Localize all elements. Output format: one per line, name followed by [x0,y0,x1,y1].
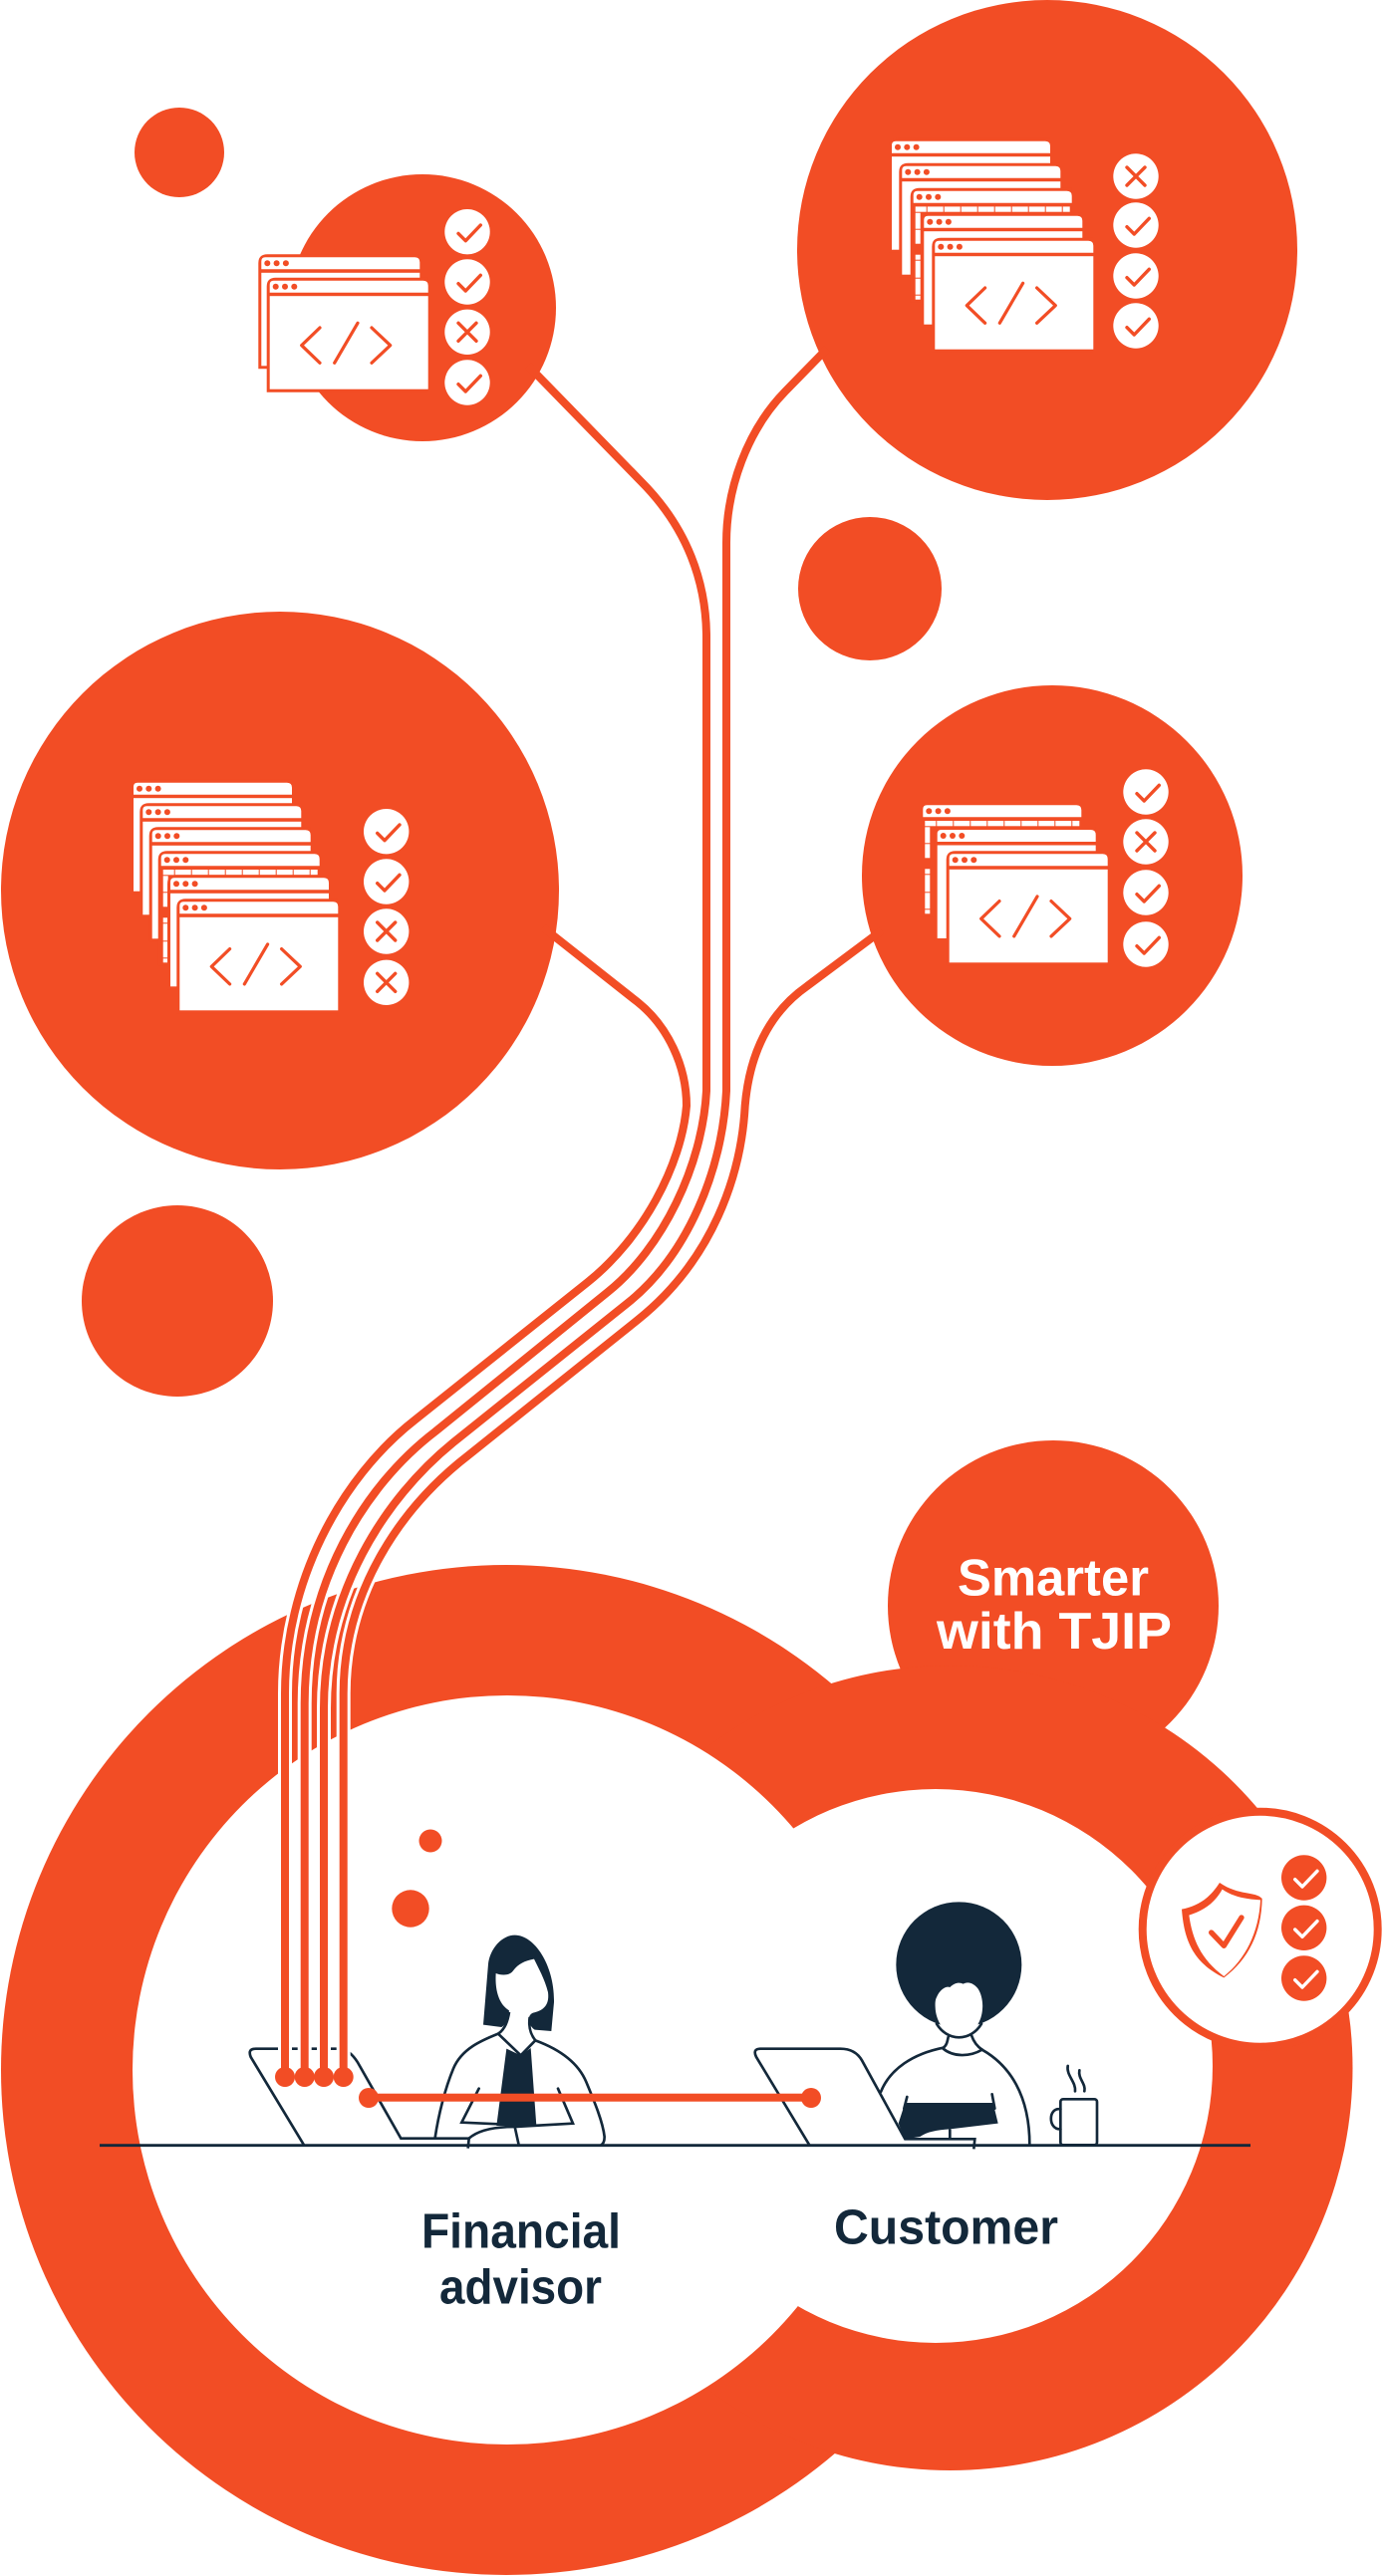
advisor body [435,2034,605,2145]
label: financial advisor: advisor [439,2261,602,2315]
label: financial advisor: Financial [421,2205,621,2259]
small dots inside cloud [392,1829,442,1928]
icon: coffee mug [1051,2066,1097,2145]
status checks [1113,153,1159,349]
advisor hair [483,1935,554,2031]
icon: code windows stack [920,802,1108,965]
icon: code windows [258,254,428,392]
label: customer: Customer [834,2201,1058,2255]
status checks [444,209,490,405]
label: financial advisor [421,2205,621,2315]
line from left circle [285,927,687,2077]
line from upper-left circle [305,366,706,2077]
line halos over cloud [285,1419,468,2077]
connector lines from circles to advisor laptop [285,349,882,2077]
cloud shape [1,1565,1353,2575]
laptop [755,2049,974,2149]
icon: code windows stack [131,780,338,1013]
panel: five code windows circle [797,0,1297,500]
decorative circle centre [798,517,942,660]
panel: two code windows circle [258,174,556,441]
laptop [250,2049,469,2149]
decorative small circle top left [135,108,224,197]
status checks [1123,769,1169,967]
customer face [936,1982,982,2037]
verified checks [1281,1855,1326,2001]
line from right circle [344,930,882,2077]
customer hair [896,1902,1021,2027]
illustration: customer with laptop and mug [755,1902,1097,2149]
heading: smarter with TJIP: Smarter [958,1550,1149,1608]
illustration: financial advisor with laptop [250,1935,605,2149]
icon: code windows stack [889,138,1093,353]
panel: three code windows circle [862,685,1243,1066]
decorative circle lower left [82,1205,273,1397]
customer shirt [899,2103,998,2139]
status checks [364,809,409,1005]
heading: smarter with TJIP [936,1550,1172,1661]
table line [100,2144,1250,2147]
heading: smarter with TJIP: with TJIP [936,1603,1172,1661]
connector between advisor and customer laptops [359,2088,821,2108]
icon: shield [1182,1883,1262,1977]
line from top-right circle [324,349,827,2077]
line end dots [275,2067,354,2087]
badge circle: smarter with TJIP background [888,1440,1219,1771]
panel: six code windows circle [1,612,559,1169]
customer body [881,2024,1029,2145]
panel: shield badge [1143,1812,1378,2047]
